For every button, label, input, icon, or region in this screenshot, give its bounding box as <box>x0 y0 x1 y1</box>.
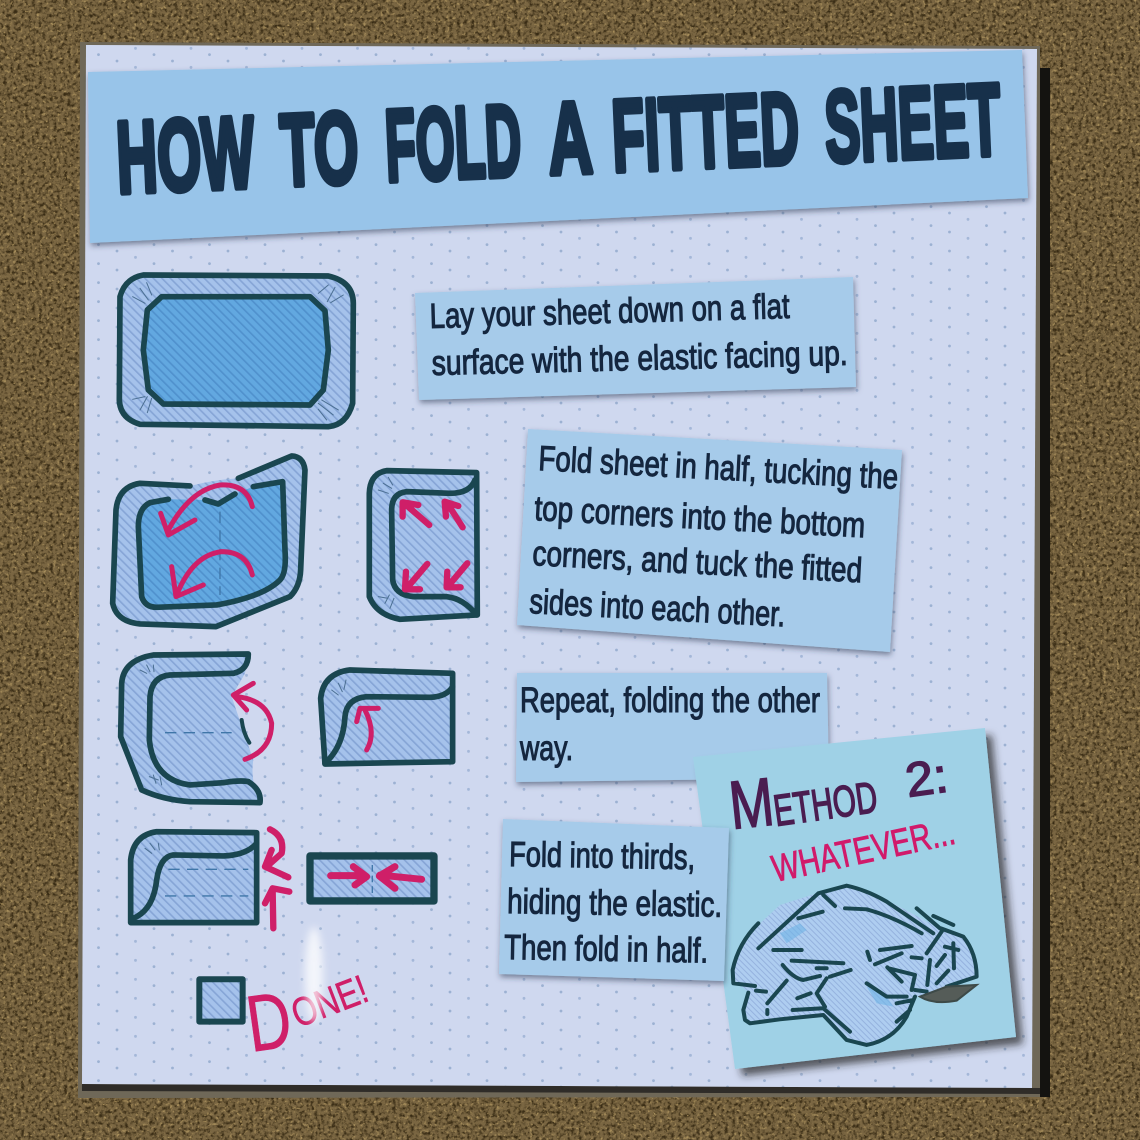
step 4 text box: Fold into thirds, <box>509 835 696 877</box>
illustration: crumpled sheet <box>732 885 977 1045</box>
paper sheet with dot grid <box>82 45 1037 1088</box>
glare on lamination <box>305 927 323 1023</box>
illustration: folding the other way <box>121 654 272 803</box>
title banner <box>88 50 1028 243</box>
heading: Method 2: M <box>726 764 777 844</box>
title: A <box>546 80 595 196</box>
step 1 text box: Lay your sheet down on a flat <box>429 287 790 336</box>
title: HOW <box>114 95 257 215</box>
illustration: tucking corners <box>369 471 477 619</box>
step 1 text box: surface with the elastic facing up. <box>431 334 848 383</box>
step 3 text box <box>516 673 829 782</box>
handwritten: Done! <box>241 967 374 1069</box>
step 2 text box: top corners into the bottom <box>534 489 866 545</box>
step 2 text box: corners, and tuck the fitted <box>532 534 863 590</box>
title: FITTED <box>610 71 801 193</box>
heading: Method 2: ETHOD <box>771 773 880 836</box>
illustration: second fold result <box>321 670 453 764</box>
title: TO <box>278 90 361 208</box>
laminated sheet edge and shadow <box>78 42 1050 1098</box>
step 2 text box <box>517 429 902 652</box>
illustration: folding sheet in half <box>113 456 305 627</box>
illustration: fold into thirds <box>131 829 289 928</box>
handwritten: Done!: D <box>241 975 297 1069</box>
illustration: finished square <box>199 979 243 1022</box>
handwritten: Done!: ONE! <box>285 967 374 1036</box>
heading: Method 2: 2: <box>902 750 951 808</box>
title: FOLD <box>383 83 524 203</box>
subheading: whatever: WHATEVER... <box>768 811 959 891</box>
sticky note: method 2 <box>693 728 1016 1069</box>
step 4 text box: Then fold in half. <box>504 928 709 971</box>
step 1 text box <box>415 277 856 400</box>
title <box>114 62 1003 215</box>
illustration: folded in half <box>310 856 434 901</box>
illustration: flat sheet <box>119 275 353 427</box>
step 3 text box: way. <box>519 729 573 768</box>
step 4 text box <box>499 819 729 981</box>
step 4 text box: hiding the elastic. <box>507 882 723 925</box>
heading: Method 2 <box>726 750 951 844</box>
step 2 text box: sides into each other. <box>529 582 786 634</box>
step 3 text box: Repeat, folding the other <box>520 681 820 720</box>
step 2 text box: Fold sheet in half, tucking the <box>538 439 899 497</box>
